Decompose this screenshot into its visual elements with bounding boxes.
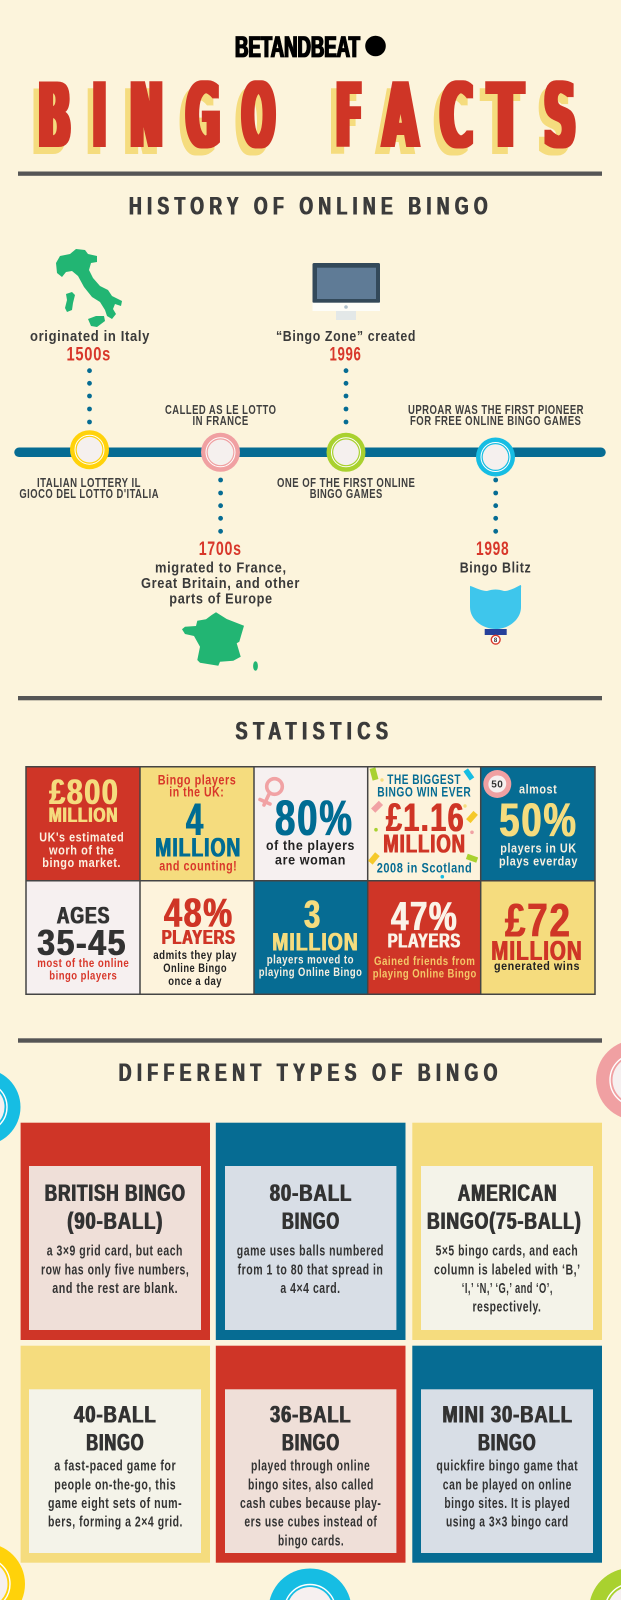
card: 40-ball bingo: people on-the-go, this: [54, 1476, 176, 1493]
text: 1700s migrated to France: Great Britain, and other: [141, 576, 300, 592]
label: italian lottery: GIOCO DEL LOTTO D'ITALIA: [19, 486, 159, 501]
marker: pink: [201, 433, 240, 472]
stat: 4 million: [155, 771, 241, 873]
stat: biggest win: £1.16: [386, 796, 465, 840]
label: called as le lotto: [165, 402, 276, 428]
panel: statistics grid: [26, 767, 595, 994]
stat: 72 million: generated wins: [494, 959, 580, 973]
marker: blue: [476, 438, 515, 476]
decoration: bingo ball blue bottom: [268, 1568, 352, 1600]
stat: 800 million: UK's estimated: [39, 830, 124, 845]
decoration: bingo ball green: [589, 1568, 621, 1600]
card: 36-ball bingo: bingo sites, also called: [248, 1476, 374, 1493]
icon: venus symbol: [260, 779, 282, 805]
stat: ages 35-45: bingo players: [49, 969, 117, 983]
marker: green: [326, 433, 366, 472]
title: BINGO FACTS: B: [38, 64, 71, 169]
stat: almost 50 percent: 50%: [499, 794, 578, 847]
icon: bingo ball 50: 50: [491, 780, 503, 790]
text: 1998 Bingo Blitz: 1998: [476, 538, 509, 560]
stat: biggest win: MILLION: [383, 829, 466, 859]
stat: 3 million: [259, 894, 362, 979]
card: british bingo: row has only five numbers,: [41, 1261, 189, 1278]
stat: 4 million: in the UK:: [169, 784, 224, 800]
marker: yellow: [70, 430, 109, 469]
card: 40-ball bingo: [21, 1346, 210, 1563]
label: first online bingo games: [277, 475, 415, 501]
text: 1700s migrated to France: [141, 538, 300, 608]
title: BINGO FACTS: G: [180, 71, 214, 176]
stat: 48 percent: 48%: [164, 890, 234, 936]
title: BINGO FACTS: B: [32, 71, 66, 176]
stat: almost 50 percent: players in UK: [500, 841, 577, 856]
title: BINGO FACTS: T: [488, 64, 523, 169]
stat: 47 percent: playing Online Bingo: [373, 967, 477, 981]
card: 80-ball bingo: game uses balls numbered: [237, 1243, 384, 1260]
title: BINGO FACTS: S: [538, 71, 570, 176]
confetti: [368, 767, 478, 878]
stat: ages 35-45: [37, 902, 129, 983]
title: BINGO FACTS: C: [440, 64, 473, 169]
title: BINGO FACTS: N: [130, 64, 163, 169]
text: originated in Italy 1500s: originated in Italy: [30, 329, 150, 345]
title: BINGO FACTS: O: [242, 64, 275, 169]
stat: biggest win: [368, 767, 478, 878]
stat: 800 million: bingo market.: [42, 855, 121, 870]
stat: 48 percent: once a day: [168, 974, 222, 988]
decoration: bingo ball blue: [0, 1068, 20, 1146]
card: 36-ball bingo: ers use cubes instead of: [244, 1514, 378, 1531]
card: american bingo: ‘I,’ ‘N,’ ‘G,’ and ‘O’,: [462, 1280, 553, 1297]
timeline bar: [19, 448, 601, 457]
card: 40-ball bingo: game eight sets of num-: [48, 1495, 182, 1512]
label: first online bingo games: ONE OF THE FIRST ONLINE: [277, 475, 415, 490]
stat: ages 35-45: most of the online: [37, 956, 129, 970]
label: first online bingo games: BINGO GAMES: [310, 486, 383, 501]
label: called as le lotto: CALLED AS LE LOTTO: [165, 402, 276, 417]
icon: Italy map: [56, 249, 122, 327]
stat: 3 million: 3: [304, 894, 322, 937]
label: uproar pioneer: [408, 402, 584, 428]
text: Bingo Zone created 1996: 1996: [330, 344, 362, 366]
stat: 800 million: worh of the: [48, 842, 114, 857]
title: BINGO FACTS: A: [378, 71, 413, 176]
stat: 80 percent woman: are woman: [275, 852, 346, 868]
text: originated in Italy 1500s: [30, 329, 150, 366]
stat: 4 million: MILLION: [155, 833, 241, 863]
stat: biggest win: THE BIGGEST: [387, 771, 461, 787]
stat: biggest win: BINGO WIN EVER: [377, 784, 471, 800]
card: mini 30-ball bingo: using a 3×3 bingo card: [446, 1514, 569, 1531]
text: 1700s migrated to France: migrated to France,: [155, 560, 287, 576]
stat: 800 million: [39, 773, 124, 870]
stat: 3 million: playing Online Bingo: [259, 965, 362, 979]
title: BINGO FACTS: F: [330, 71, 356, 176]
card: american bingo: respectively.: [472, 1299, 541, 1316]
stat: 72 million: [491, 894, 583, 973]
decoration: bingo ball pink: [596, 1040, 621, 1120]
card: british bingo: BRITISH BINGO: [45, 1180, 186, 1207]
stat: 3 million: MILLION: [272, 929, 359, 957]
title: BINGO FACTS: F: [336, 64, 362, 169]
title: BINGO FACTS: [32, 64, 576, 176]
stat: 3 million: players moved to: [267, 952, 354, 966]
card: 40-ball bingo: a fast-paced game for: [54, 1458, 176, 1475]
stat: 800 million: MILLION: [49, 803, 118, 827]
stat: 47 percent: Gained friends from: [374, 954, 475, 968]
stat: 4 million: and counting!: [159, 858, 237, 873]
text: 1700s migrated to France: parts of Europe: [169, 592, 273, 608]
card: 36-ball bingo: 36-BALL: [270, 1401, 352, 1428]
stat: biggest win: 2008 in Scotland: [377, 860, 472, 875]
text: originated in Italy 1500s: 1500s: [66, 344, 111, 366]
card: 36-ball bingo: cash cubes because play-: [240, 1495, 381, 1512]
card: 40-ball bingo: bers, forming a 2×4 grid.: [48, 1514, 183, 1531]
stat: 72 million: £72: [505, 894, 572, 947]
heading: statistics: STATISTICS: [236, 718, 394, 746]
title: BINGO FACTS: I: [93, 64, 106, 169]
stat: ages 35-45: 35-45: [37, 922, 127, 963]
stat: ages 35-45: AGES: [57, 902, 110, 929]
card: american bingo: AMERICAN: [458, 1180, 557, 1207]
text: 1998 Bingo Blitz: [460, 538, 531, 576]
title: BINGO FACTS: A: [383, 64, 418, 169]
logo: BETANDBEAT: BETANDBEAT: [235, 31, 360, 64]
icon: Bingo Blitz cat logo: 8: [494, 638, 498, 644]
stat: 80 percent woman: [260, 779, 355, 868]
title: BINGO FACTS: C: [434, 71, 468, 176]
card: 80-ball bingo: from 1 to 80 that spread in: [238, 1261, 383, 1278]
card: british bingo: (90-BALL): [67, 1208, 163, 1235]
dotted connectors: [87, 368, 498, 534]
title: BINGO FACTS: I: [88, 71, 100, 176]
title: BINGO FACTS: G: [186, 64, 220, 169]
card: mini 30-ball bingo: MINI 30-BALL: [442, 1401, 573, 1428]
stat: 72 million: MILLION: [491, 935, 583, 966]
stat: 48 percent: admits they play: [153, 948, 237, 962]
card: american bingo: [412, 1123, 602, 1340]
icon: France map: [182, 612, 258, 671]
card: mini 30-ball bingo: [412, 1346, 602, 1563]
timeline: [19, 430, 601, 476]
stat: almost 50 percent: almost: [519, 782, 557, 796]
card: 36-ball bingo: [216, 1346, 406, 1563]
card: 80-ball bingo: a 4×4 card.: [280, 1280, 341, 1297]
stat: 80 percent woman: 80%: [275, 790, 354, 846]
title: BINGO FACTS: O: [236, 71, 270, 176]
card: 80-ball bingo: 80-BALL: [270, 1180, 352, 1207]
stat: 47 percent: 47%: [391, 893, 458, 939]
text: S: [544, 64, 576, 169]
text: 1998 Bingo Blitz: Bingo Blitz: [460, 560, 531, 576]
label: italian lottery: [19, 475, 159, 501]
card: 40-ball bingo: 40-BALL: [74, 1401, 157, 1428]
stat: 4 million: Bingo players: [158, 771, 236, 787]
stat: 47 percent: [373, 893, 477, 981]
text: Bingo Zone created 1996: [276, 329, 416, 366]
decoration: bingo ball yellow: [0, 1543, 25, 1600]
stat: almost 50 percent: [483, 770, 578, 869]
card: british bingo: and the rest are blank.: [52, 1280, 178, 1297]
card: 40-ball bingo: BINGO: [86, 1429, 144, 1456]
stat: 4 million: 4: [186, 794, 205, 845]
stat: 48 percent: [153, 890, 237, 988]
label: italian lottery: ITALIAN LOTTERY IL: [37, 475, 141, 490]
label: called as le lotto: IN FRANCE: [192, 413, 249, 428]
stat: almost 50 percent: plays everday: [499, 854, 578, 869]
card: 36-ball bingo: BINGO: [282, 1429, 340, 1456]
stat: 48 percent: Online Bingo: [163, 961, 227, 975]
card: mini 30-ball bingo: BINGO: [478, 1429, 536, 1456]
text: 1700s migrated to France: 1700s: [199, 538, 242, 560]
card: 80-ball bingo: BINGO: [282, 1208, 340, 1235]
text: Bingo Zone created 1996: “Bingo Zone” created: [276, 329, 416, 345]
card: 80-ball bingo: [216, 1123, 406, 1340]
card: 36-ball bingo: bingo cards.: [278, 1532, 344, 1549]
card: british bingo: [21, 1123, 210, 1340]
title: BINGO FACTS: N: [124, 71, 158, 176]
stat: 47 percent: PLAYERS: [388, 931, 461, 953]
card: british bingo: a 3×9 grid card, but each: [47, 1243, 183, 1260]
icon: desktop monitor: [312, 263, 380, 320]
stat: 800 million: £800: [49, 773, 119, 812]
card: 36-ball bingo: played through online: [251, 1458, 370, 1475]
title: BINGO FACTS: T: [482, 71, 518, 176]
stat: 48 percent: PLAYERS: [162, 926, 236, 949]
icon: Bingo Blitz cat logo: [470, 585, 521, 644]
stat: 80 percent woman: of the players: [266, 837, 355, 853]
